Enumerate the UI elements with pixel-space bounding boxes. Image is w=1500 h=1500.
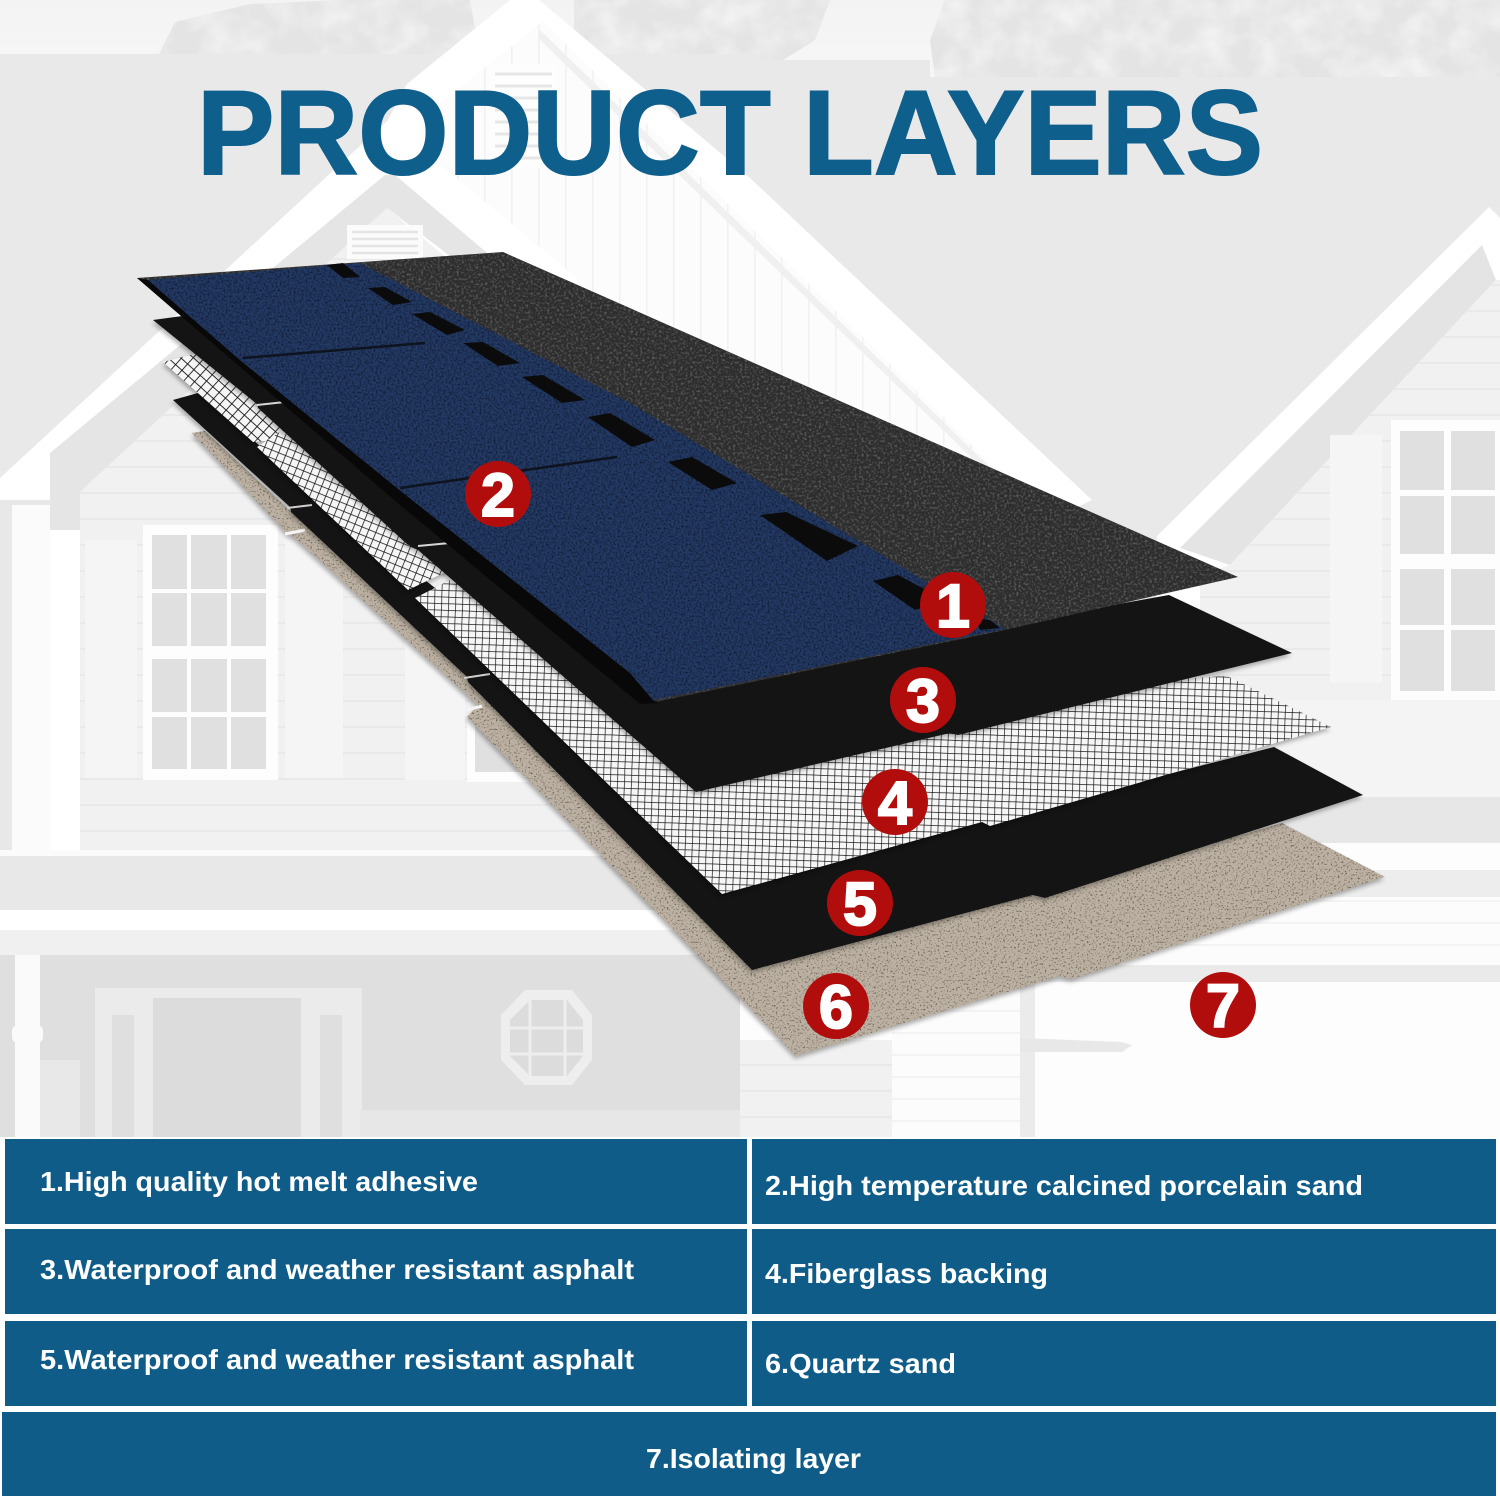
layer 4: fiberglass mesh	[163, 350, 1331, 894]
marker 7	[1190, 972, 1256, 1040]
legend 4: 4.Fiberglass backing	[765, 1258, 1048, 1289]
layer 5: asphalt	[173, 393, 1363, 970]
main roof	[0, 54, 1500, 854]
marker 2	[465, 461, 531, 529]
front gable vent	[347, 225, 423, 259]
marker 3	[890, 667, 956, 735]
background trees	[158, 0, 1500, 78]
background: faded house photo	[0, 0, 1500, 1140]
second window, partly hidden	[405, 640, 537, 782]
marker 2: 2	[481, 461, 515, 529]
right window	[1330, 420, 1500, 700]
front door	[95, 988, 362, 1140]
front gable	[0, 121, 640, 860]
numbered markers	[465, 461, 1256, 1041]
layer 1: adhesive strips	[327, 263, 1000, 630]
legend 2: 2.High temperature calcined porcelain sand	[765, 1170, 1363, 1201]
layer 3: asphalt	[153, 300, 1292, 792]
left window	[85, 525, 343, 780]
legend 6: 6.Quartz sand	[765, 1348, 956, 1379]
marker 3: 3	[906, 667, 940, 735]
legend 5	[5, 1321, 747, 1406]
shingle backing	[137, 252, 1238, 702]
marker 7: 7	[1206, 972, 1240, 1040]
legend 5: 5.Waterproof and weather resistant asphalt	[40, 1344, 634, 1375]
porch column	[12, 955, 80, 1140]
right porch bands	[750, 700, 1500, 982]
marker 4: 4	[878, 769, 912, 837]
legend 6	[752, 1321, 1496, 1406]
marker 1: 1	[936, 572, 970, 640]
layer 2: coloured shingle with sand	[137, 252, 1238, 704]
marker 5: 5	[843, 870, 877, 938]
shingle edge	[137, 278, 658, 704]
layer 3 gaps	[257, 402, 450, 546]
lower right wall	[740, 982, 1500, 1140]
legend 7	[2, 1412, 1496, 1496]
legend 7: 7.Isolating layer	[646, 1443, 861, 1474]
porch roof and trim	[0, 850, 760, 955]
vent on main gable	[488, 64, 558, 168]
shingle slits	[243, 343, 617, 488]
blue granules	[148, 263, 1005, 700]
legend 3	[5, 1229, 747, 1314]
legend 2	[752, 1139, 1496, 1224]
porch wall	[0, 955, 760, 1140]
title: PRODUCT LAYERS	[197, 66, 1263, 200]
octagon window	[501, 990, 592, 1085]
marker 1	[920, 572, 986, 640]
main gable	[380, 0, 1092, 900]
porch steps	[360, 1110, 740, 1140]
legend 4	[752, 1229, 1496, 1314]
layer 5 gaps	[287, 505, 490, 678]
legend table	[0, 1137, 1500, 1500]
marker 6	[803, 973, 869, 1041]
legend 3: 3.Waterproof and weather resistant asphalt	[40, 1254, 634, 1285]
marker 6: 6	[819, 973, 853, 1041]
marker 5	[827, 870, 893, 938]
layer 6: quartz sand	[192, 431, 1385, 1056]
right gable	[1150, 207, 1500, 900]
tan layer gaps	[285, 530, 482, 710]
product layers stack	[137, 252, 1385, 1056]
marker 4	[862, 769, 928, 837]
legend 1: 1.High quality hot melt adhesive	[40, 1166, 478, 1197]
legend 1	[5, 1139, 747, 1224]
